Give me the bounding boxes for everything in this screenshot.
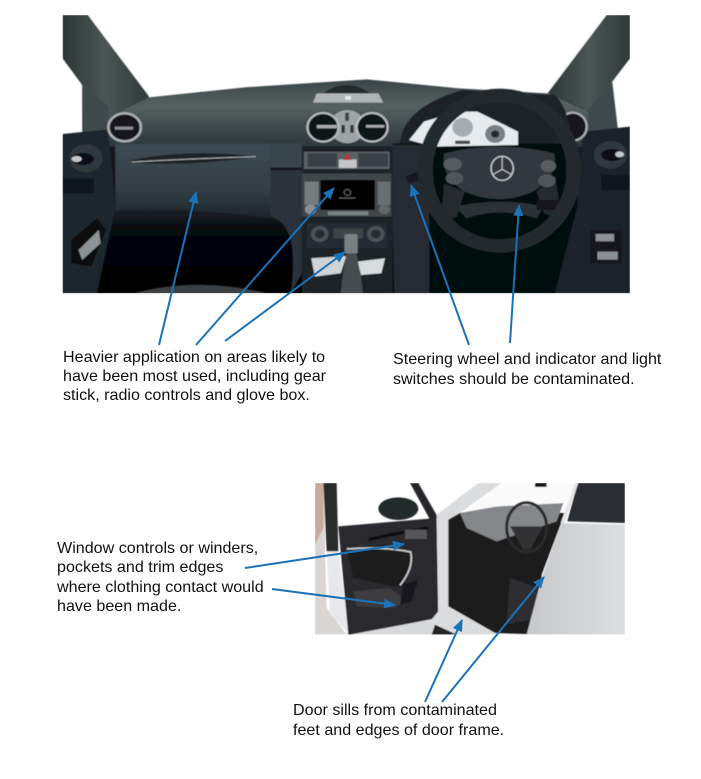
indicator stalk	[406, 172, 418, 184]
text: window controls: Window controls or winders,	[57, 539, 258, 557]
arrow: window controls	[245, 544, 404, 568]
shiny trim	[311, 256, 385, 293]
cabin steering wheel	[507, 503, 547, 552]
footwells	[97, 207, 304, 293]
cabin base	[63, 137, 630, 293]
seat edge	[134, 285, 267, 293]
text: door sills: Door sills from contaminated	[293, 701, 497, 719]
text: door sills: feet and edges of door frame.	[293, 721, 504, 739]
centre vents	[334, 109, 361, 144]
side panels	[271, 143, 302, 167]
side vent right	[559, 113, 587, 141]
mirror interior	[535, 483, 547, 487]
star badge	[491, 156, 513, 180]
steering wheel rim	[425, 95, 574, 246]
wheel buttons	[443, 158, 462, 171]
centre console	[302, 147, 392, 293]
arrow: door frame edge	[442, 577, 544, 702]
right door	[551, 127, 630, 293]
arrow: gear stick	[225, 252, 345, 341]
text: window controls: where clothing contact would	[56, 578, 264, 596]
text: steering wheel and switches: switches should be contaminated.	[393, 370, 635, 388]
door edge	[315, 483, 347, 635]
text: heavier application: have been most used, including gear	[63, 367, 327, 385]
text: heavier application	[63, 348, 327, 404]
right of console trim	[391, 145, 429, 293]
photo: car dashboard	[63, 15, 630, 293]
mirror	[378, 497, 418, 520]
glove box	[115, 144, 271, 218]
photo: open car door	[315, 483, 625, 635]
text: window controls: pockets and trim edges	[57, 558, 223, 576]
arrow: door sill	[425, 620, 462, 702]
text: steering wheel and switches	[393, 350, 662, 388]
arrow: indicator switch	[411, 185, 469, 345]
radio	[302, 173, 391, 217]
text: heavier application: Heavier application on areas likely to	[63, 348, 325, 366]
instrument cluster	[409, 112, 518, 147]
text: heavier application: stick, radio controls and glove box.	[63, 386, 310, 404]
rear car body	[527, 523, 625, 635]
arrow: door pocket	[272, 589, 395, 605]
arrow: glove box	[159, 192, 196, 345]
text: steering wheel and switches: Steering wheel and indicator and light	[393, 350, 662, 368]
door sill	[350, 620, 440, 635]
text: window controls: have been made.	[57, 597, 181, 615]
left door	[63, 129, 115, 293]
side vent left	[108, 113, 141, 141]
door panel	[338, 518, 438, 635]
left windscreen pillar	[63, 15, 149, 120]
instrument hood	[400, 90, 572, 143]
right windscreen pillar	[548, 15, 630, 113]
steering wheel hub	[444, 147, 555, 199]
gear stick	[344, 234, 358, 254]
text: door sills	[293, 701, 504, 739]
windscreen mirror pod	[323, 85, 370, 93]
climate controls	[307, 223, 387, 248]
cabin interior	[448, 513, 565, 635]
arrow: radio controls	[196, 188, 334, 345]
arrow: steering wheel	[510, 205, 519, 343]
text: window controls	[56, 539, 264, 615]
window frame	[410, 483, 438, 520]
pillar and sill	[430, 483, 502, 635]
dashboard top	[108, 79, 588, 147]
